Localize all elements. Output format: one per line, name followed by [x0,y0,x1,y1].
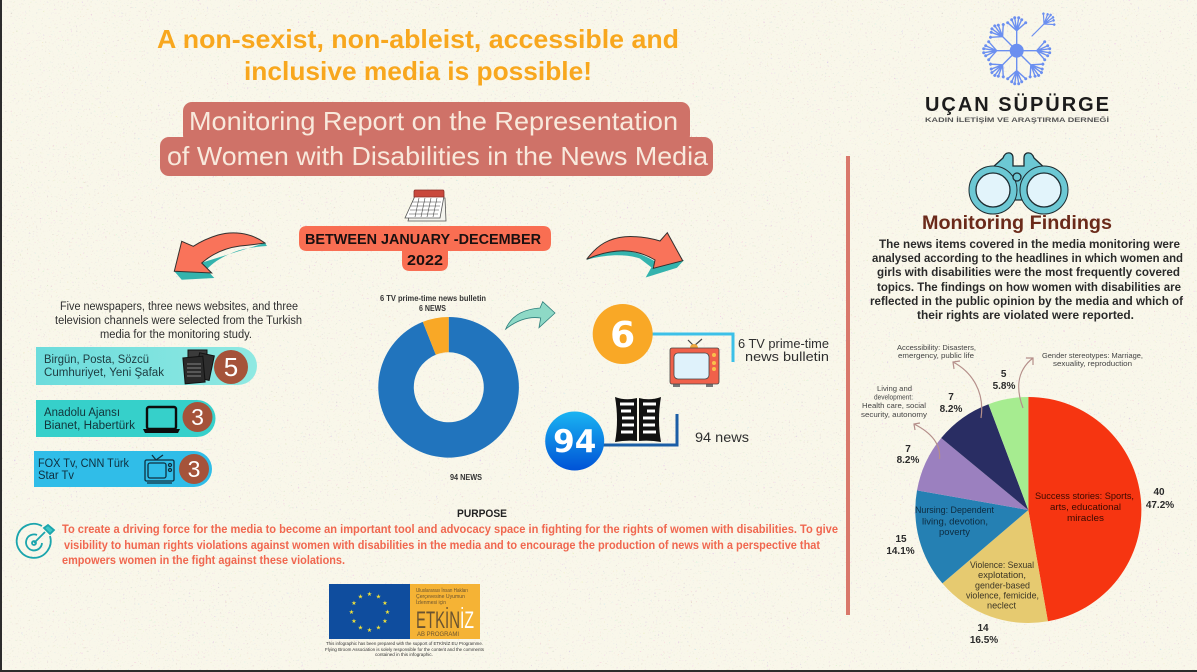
value: 7 / 8.2% living: 8.2% [897,455,920,466]
donut label: 6 news: 6 TV prime-time news bulletin [380,294,486,303]
heading: purpose: PURPOSE [457,508,507,520]
label: living and development: Health care, social [862,401,926,410]
donut label: 94 news: 94 NEWS [450,473,483,482]
report heading banner [160,102,713,176]
label: living and development: security, autonomy [861,410,927,419]
value: 14 / 16.5%: 16.5% [970,635,998,646]
badge: 5: 5 [224,352,238,382]
badge: 3: 3 [188,456,200,482]
arrow: living and development callout [914,423,940,459]
text: ETKINIZ programme: İZ [460,607,474,634]
value: 7 / 8.2% accessibility: 7 [948,392,954,403]
icon: EU stars: ★ [351,600,357,607]
icon: EU stars: ★ [382,618,388,625]
value: 7 / 8.2% accessibility: 8.2% [940,404,963,415]
text: ETKINIZ programme: İzlenmesi için [416,599,446,606]
stat: 6 TV bulletins: 6 [610,315,635,356]
panel: television pill: FOX Tv, CNN Türk [38,458,129,470]
label: 6 TV prime-time news bulletin: news bulletin [745,349,829,364]
panel: news websites pill: Anadolu Ajansı [44,407,120,419]
text: findings summary: analysed according to the headlines in which women and [872,253,1183,265]
text: media selection intro: media for the monitoring study. [100,329,252,341]
label: violence: explotation, [978,570,1026,581]
arrow: accessibility callout [953,361,982,418]
icon: EU stars: ★ [358,594,363,600]
badge: 5 [214,350,248,384]
text: media selection intro [55,301,302,341]
text: ETKINIZ programme: ETKİN [416,607,460,634]
label: success stories [1035,491,1134,524]
icon: EU stars: ★ [385,609,390,616]
pie chart [861,343,1174,646]
text: purpose body: empowers women in the fight against these violations. [62,555,345,567]
value: 5 / 5.8% [993,369,1016,392]
value: 40 / 47.2%: 40 [1153,487,1165,498]
title: inclusive media is possible! [244,56,592,86]
icon: binoculars [969,153,1068,214]
icon: EU stars: ★ [358,624,363,632]
text: findings summary: their rights are violated were reported. [917,310,1134,322]
text: purpose body: To create a driving force for the media to become an important tool and advocacy space in fighting for the rights of women with disabilities. To give [62,524,838,536]
icon: target [17,524,54,558]
text: ETKINIZ programme [416,587,474,638]
value: 14 / 16.5%: 14 [977,623,989,634]
date badge [299,226,551,271]
icon: dandelion [982,9,1059,85]
label: nursing [915,505,994,538]
slice: accessibility [941,404,1028,510]
icon: laptop [143,407,180,433]
value: 15 / 14.1% [886,534,915,557]
arrow: teal [506,302,555,329]
stat: 94 news: 94 [553,424,596,460]
slice: nursing [915,490,1028,583]
label: 94 news: 94 news [695,429,749,445]
icon: EU stars: ★ [376,624,381,632]
report heading banner: Monitoring Report on the Representation [189,106,678,136]
text: ETKINIZ programme: Uluslararası İnsan Hakları [416,587,468,594]
icon: television [145,455,174,483]
text: findings summary: topics. The findings on how women with disabilities are [877,282,1181,294]
text: media selection intro: television channels were selected from the Turkish [55,315,302,327]
label: living and development [861,384,927,419]
label: nursing: Nursing: Dependent [915,505,994,516]
icon: EU stars: ★ [367,627,372,634]
icon: EU stars: ★ [349,609,354,616]
panel: newspapers pill: Cumhuriyet, Yeni Şafak [44,367,164,379]
date badge: BETWEEN JANUARY -DECEMBER [305,232,542,248]
donut segment: 94 news [378,317,519,458]
arrow: left [174,233,267,280]
label: nursing: living, devotion, [922,516,988,528]
donut chart [378,294,519,482]
label: gender stereotypes: sexuality, reproduction [1053,359,1132,368]
text: purpose body: visibility to human rights violations against women with disabilities in the media and to encourage the production of news with a perspective that [64,540,820,552]
label: living and development: Living and [877,384,912,393]
vertical divider [846,156,850,615]
badge: 3 [182,402,212,432]
label: 6 TV prime-time news bulletin: 6 TV prime-time [738,336,829,351]
text: findings summary: reflected in the public opinion by the media and which of [870,296,1183,308]
text: ETKINIZ programme: AB PROGRAMI [417,632,459,638]
value: 5 / 5.8%: 5 [1001,369,1007,380]
donut segment: 6 news [423,317,449,355]
slice: living and development [917,438,1028,510]
donut label: 6 news [380,294,486,313]
label: violence: Violence: Sexual [970,560,1034,571]
icon: EU stars [349,591,390,634]
icon: EU stars: ★ [351,618,357,625]
label: violence: neclect [987,600,1016,612]
text: purpose body [62,524,838,567]
badge: 3 [179,454,209,484]
panel: television pill [34,451,212,487]
icon: open newspaper [615,397,661,442]
heading: monitoring findings: Monitoring Findings [922,212,1112,234]
stat: 6 TV bulletins [593,304,829,387]
label: success stories: miracles [1067,513,1104,524]
value: 15 / 14.1%: 15 [895,534,907,545]
logo: EU and ETKINIZ [329,584,480,639]
panel: news websites pill [36,400,216,437]
value: 7 / 8.2% living [897,444,920,466]
label: success stories: arts, educational [1050,502,1121,513]
stat: 94 news [545,397,749,470]
icon: EU stars: ★ [376,594,381,600]
icon: newspapers [183,350,214,384]
icon: EU stars: ★ [382,600,388,607]
slice: gender stereotypes [988,397,1028,510]
text: funding disclaimer [325,640,485,657]
value: 5 / 5.8%: 5.8% [993,381,1016,392]
text: media selection intro: Five newspapers, three news websites, and three [60,301,298,313]
logo: Uçan Süpürge: UÇAN SÜPÜRGE [925,93,1109,116]
badge: 3: 3 [191,404,204,430]
value: 14 / 16.5% [970,623,998,646]
value: 40 / 47.2%: 47.2% [1146,500,1174,511]
label: gender stereotypes: Gender stereotypes: Marriage, [1042,351,1143,360]
label: living and development: development: [874,392,913,402]
text: findings summary [870,239,1183,322]
value: 40 / 47.2% [1146,487,1174,511]
logo: Uçan Süpürge [925,9,1109,124]
value: 7 / 8.2% living: 7 [905,444,911,455]
label: success stories: Success stories: Sports, [1035,491,1134,502]
arrow: right [587,233,683,277]
slice: violence [942,510,1048,623]
label: accessibility [897,343,976,360]
title: A non-sexist, non-ableist, accessible and [157,24,679,54]
panel: television pill: Star Tv [38,470,74,482]
icon: calendar [405,190,446,221]
label: violence [966,560,1039,612]
label: accessibility: Accessibility: Disasters, [897,343,976,352]
donut label: 6 news: 6 NEWS [419,304,447,313]
label: 6 TV prime-time news bulletin [738,336,829,364]
report heading banner: of Women with Disabilities in the News Media [167,141,709,171]
date badge: 2022 [407,253,443,269]
label: violence: gender-based [975,580,1030,592]
text: funding disclaimer: This infographic has been prepared with the support of ETKİNİZ EU Programme. [326,640,483,646]
icon: retro TV [670,339,719,387]
text: funding disclaimer: Flying Broom Association is solely responsible for the content and the comments [325,647,485,652]
label: nursing: poverty [939,527,970,538]
text: ETKINIZ programme: Çerçevesine Uyumun [416,594,465,600]
panel: newspapers pill [36,347,257,385]
slice: success stories [1028,397,1141,621]
title [157,24,679,86]
text: findings summary: girls with disabilities were the most frequently covered [877,267,1180,279]
panel: news websites pill: Bianet, Habertürk [44,420,135,432]
logo: Uçan Süpürge: KADIN İLETİŞİM VE ARAŞTIRMA DERNEĞİ [925,115,1109,124]
panel: newspapers pill: Birgün, Posta, Sözcü [44,354,149,366]
arrow: gender stereotypes callout [1019,358,1033,408]
value: 15 / 14.1%: 14.1% [886,546,915,557]
icon: EU stars: ★ [367,591,372,598]
label: violence: violence, femicide, [966,590,1039,602]
label: accessibility: emergency, public life [898,351,974,360]
text: funding disclaimer: contained in this infographic. [375,652,433,657]
text: findings summary: The news items covered in the media monitoring were [879,239,1180,251]
value: 7 / 8.2% accessibility [940,392,963,415]
label: gender stereotypes [1042,351,1143,368]
